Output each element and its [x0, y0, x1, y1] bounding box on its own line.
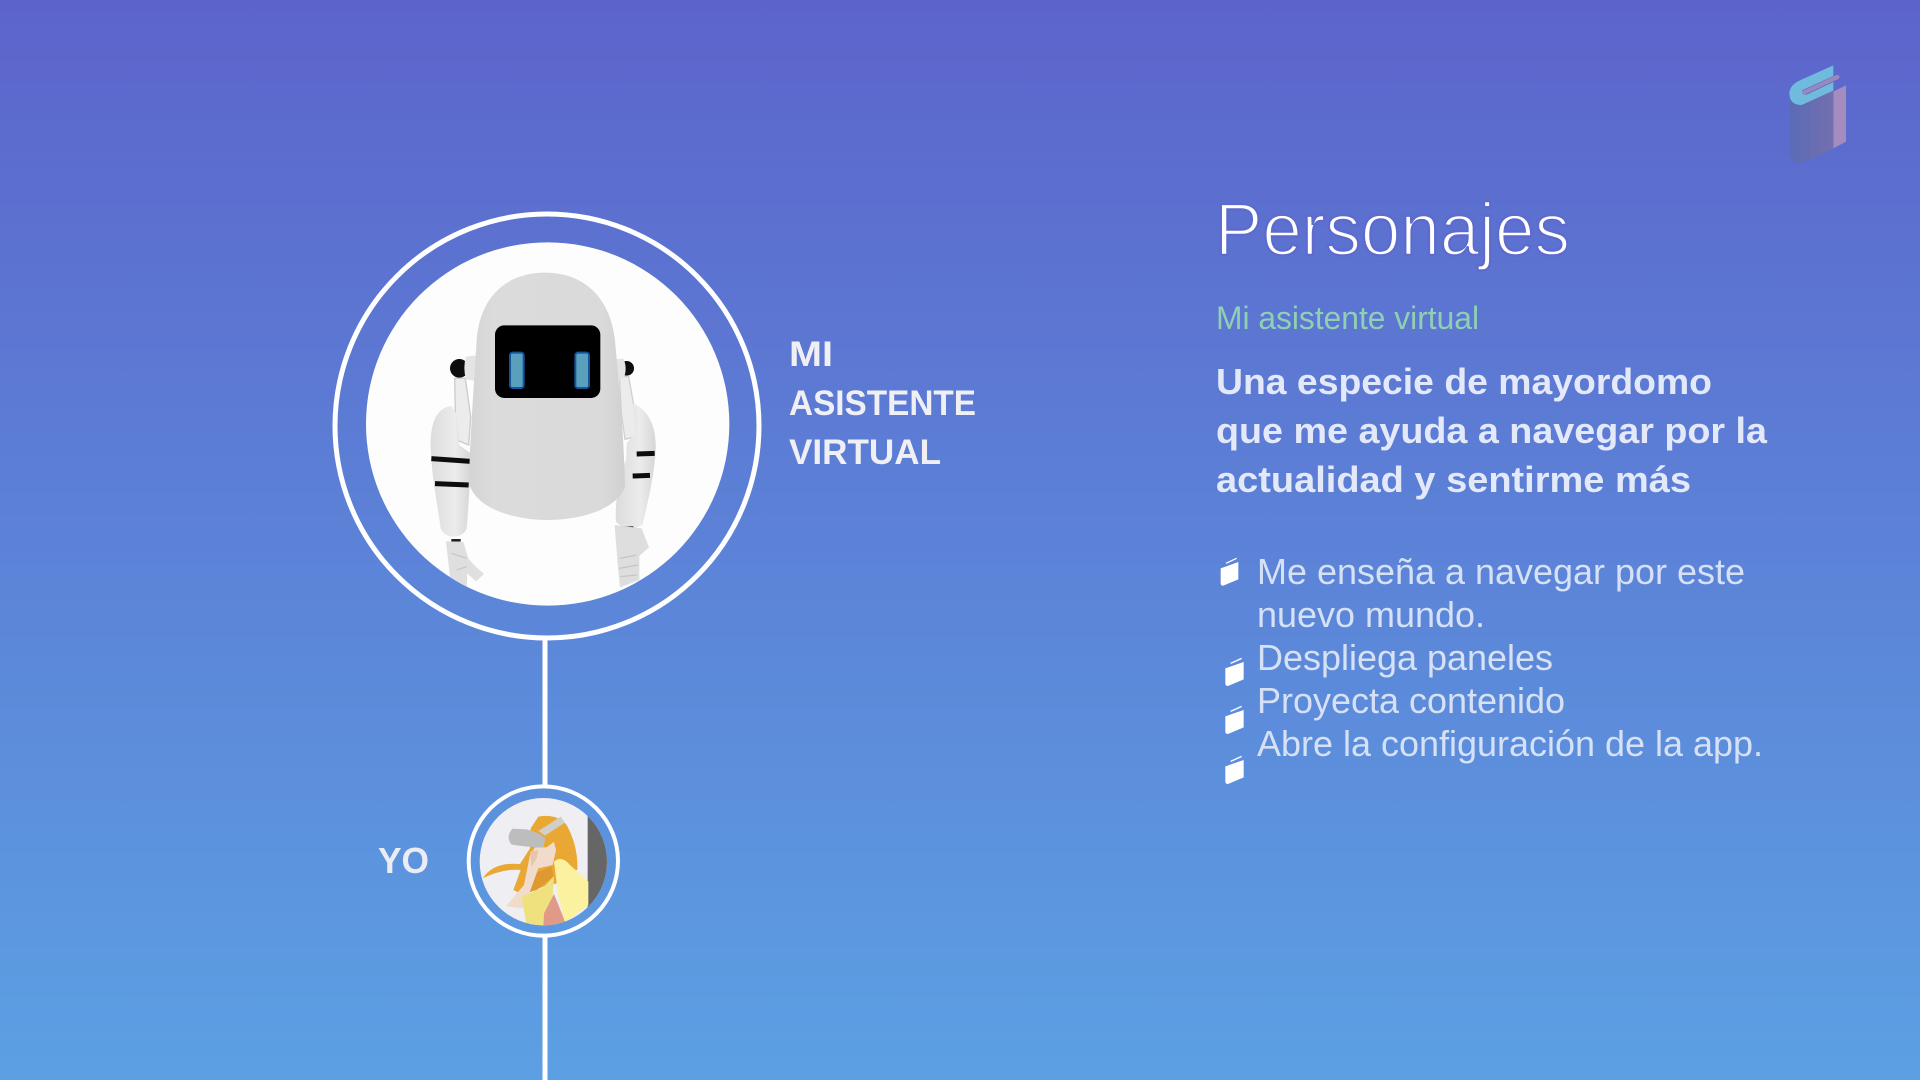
skin [506, 842, 556, 908]
bullet list text: Abre la configuración de la app. [1257, 723, 1763, 764]
bullet list text: Me enseña a navegar por este [1257, 551, 1745, 592]
hair [483, 816, 577, 895]
bold description: actualidad y sentirme más [1216, 459, 1691, 500]
right shoulder link [619, 377, 636, 439]
headset [538, 817, 565, 836]
right hand [615, 525, 649, 587]
logo: book icon [1789, 65, 1846, 163]
label: mi asistente virtual: ASISTENTE [789, 383, 976, 423]
bullet list text: nuevo mundo. [1257, 594, 1485, 635]
ears [450, 359, 466, 378]
label: yo: YO [378, 840, 429, 881]
large ring with robot portrait [335, 214, 759, 638]
bullet list text [1257, 551, 1763, 764]
right arm [616, 403, 656, 528]
connector line [542, 638, 548, 1080]
subtitle: Mi asistente virtual [1216, 300, 1479, 336]
bold description: Una especie de mayordomo [1216, 361, 1712, 402]
bullet list text: Proyecta contenido [1257, 680, 1565, 721]
left hand [446, 541, 484, 590]
left shoulder link [455, 378, 471, 445]
robot visor [495, 325, 600, 398]
label: mi asistente virtual [789, 334, 976, 472]
robot assistant [431, 273, 656, 590]
jacket [554, 859, 588, 923]
shirt [522, 876, 561, 927]
left arm [431, 406, 471, 537]
bold description [1216, 361, 1768, 500]
title: Personajes [1215, 188, 1570, 271]
bullet book icons [1221, 558, 1244, 784]
small ring with user avatar [469, 786, 618, 936]
bullet list text: Despliega paneles [1257, 637, 1553, 678]
bold description: que me ayuda a navegar por la [1216, 410, 1768, 451]
robot eyes [510, 353, 589, 388]
woman with VR headset [483, 813, 611, 928]
body [469, 273, 625, 520]
label: mi asistente virtual: VIRTUAL [789, 432, 941, 472]
label: mi asistente virtual: MI [789, 334, 833, 374]
